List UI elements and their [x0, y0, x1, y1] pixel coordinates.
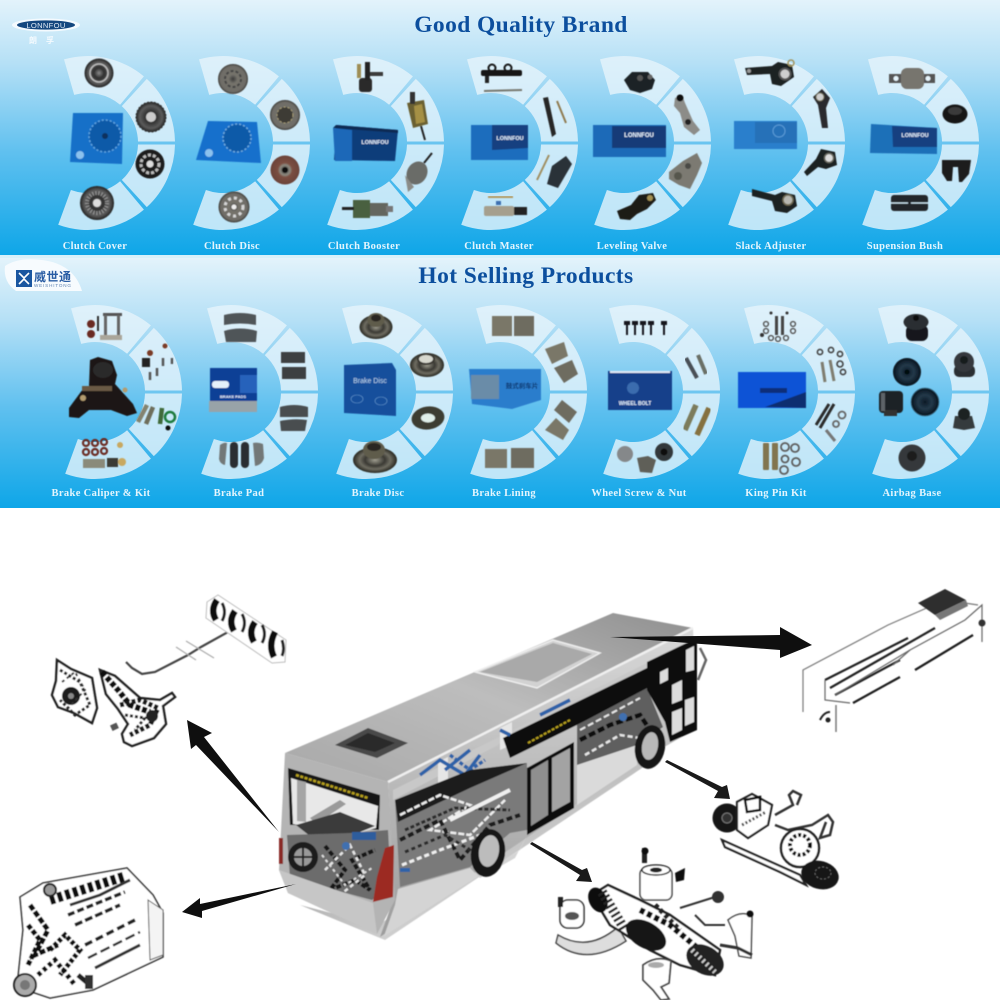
right gear hub: [681, 938, 729, 982]
part drawing: front axle assembly: [556, 848, 754, 1000]
engine block outline: [17, 868, 163, 998]
axle beam: [722, 840, 806, 885]
part drawing: rear axle assembly: [712, 791, 842, 893]
part: booster top: [357, 62, 383, 92]
panel background: [0, 0, 1000, 255]
intake details: [28, 880, 140, 985]
connecting pipe: [126, 632, 228, 674]
product box: [333, 125, 398, 161]
lower front side panel: [384, 835, 527, 936]
arc segments: [461, 56, 578, 230]
valve housing left: [52, 660, 97, 723]
flywheel cover: [148, 900, 163, 960]
part: bush bottom: [891, 195, 928, 211]
product: airbag base: [872, 305, 989, 499]
part: disc top: [218, 64, 248, 94]
part: bush right lower: [942, 160, 971, 182]
part: disc right lower: [410, 404, 446, 432]
main housing: [584, 884, 720, 975]
product box: Brake Disc: [353, 378, 387, 385]
part: bolts top: [624, 321, 667, 335]
part: kit bottom: [83, 439, 126, 468]
front cutaway chassis: [395, 763, 527, 887]
label: Leveling Valve: [597, 241, 667, 252]
part: lining right lower: [545, 400, 577, 440]
label: Clutch Disc: [204, 241, 260, 252]
part: kit right upper: [142, 344, 172, 380]
product: wheel screw and nut: [591, 305, 720, 499]
part: pads right upper: [281, 352, 306, 379]
product: clutch disc: [193, 56, 310, 252]
label: Brake Lining: [472, 488, 536, 499]
product box: WHEEL BOLT: [619, 401, 651, 407]
centre roof hatch: [475, 640, 600, 688]
logo: Lonnfou: 朗孚: [29, 35, 63, 45]
part: pads bottom: [219, 442, 264, 468]
starter: [85, 975, 93, 989]
product box: [196, 121, 261, 163]
left brake drum: [712, 804, 742, 832]
product: slack adjuster: [728, 56, 845, 252]
part: kit right lower: [138, 405, 175, 430]
product box: [469, 369, 541, 409]
label: Wheel Screw & Nut: [591, 488, 687, 499]
part: cylinder top: [481, 64, 522, 91]
arrow: to brake module: [187, 720, 279, 832]
valve rail: [50, 876, 126, 900]
label: Slack Adjuster: [735, 241, 807, 252]
part: kit bottom: [763, 443, 800, 474]
mid window columns: [438, 722, 512, 786]
product: leveling valve: [593, 56, 711, 252]
part: kit right lower: [816, 404, 846, 441]
title: Hot Selling Products: [418, 263, 634, 289]
product box: LONNFOU: [624, 133, 654, 139]
logo: Weishitong: 威世通: [34, 269, 71, 284]
part: bush top: [889, 68, 935, 89]
arc segments: [327, 56, 444, 230]
part: cylinder bottom: [484, 197, 527, 216]
bus roof: [285, 613, 693, 782]
label: Airbag Base: [883, 488, 941, 499]
tail light: [373, 845, 394, 902]
right air spring: [720, 910, 754, 958]
product box: [209, 368, 257, 412]
part: nuts bottom: [617, 443, 673, 473]
roof panel sketch: [803, 600, 978, 712]
blue air system pipes: [420, 700, 630, 775]
part: pads top: [224, 313, 257, 342]
coil valve row: [206, 595, 286, 663]
arc segments: [738, 305, 855, 479]
product box: [471, 125, 528, 160]
left air spring: [556, 897, 626, 955]
upper window band: [393, 645, 683, 800]
lower rear side panel: [577, 738, 637, 805]
label: Brake Pad: [214, 488, 264, 499]
lower rails: [853, 635, 973, 703]
product box: LONNFOU: [361, 140, 389, 146]
part: caliper: [69, 357, 137, 418]
product box: [70, 113, 123, 164]
roof rail highlight: [388, 628, 693, 782]
part: booster right upper: [407, 92, 428, 140]
arc segments: [603, 305, 720, 479]
label: Clutch Booster: [328, 241, 400, 252]
part: disc right upper: [410, 353, 444, 377]
product box: [608, 371, 672, 410]
panel: good quality brand: [0, 0, 1000, 255]
product: brake disc: [336, 305, 453, 499]
break marks: [176, 641, 214, 660]
part: studs right lower: [685, 405, 709, 435]
part: base right upper: [954, 352, 975, 377]
part: disc top: [360, 313, 392, 339]
part: valve right upper: [674, 94, 700, 135]
part: adjuster right upper: [813, 89, 830, 128]
part: disc bottom: [218, 192, 250, 222]
part: adjuster top: [745, 60, 794, 86]
part: disc right lower: [270, 156, 300, 184]
part: bolts right upper: [686, 355, 706, 378]
part: valve bottom: [617, 193, 656, 220]
part: cover right lower: [136, 150, 164, 178]
logo: Lonnfou: LONNFOU: [26, 21, 66, 30]
product box: [344, 363, 396, 416]
part: base top: [904, 314, 928, 341]
part: adjuster bottom: [752, 189, 797, 213]
part: disc bottom: [353, 441, 397, 473]
arrow: to rear axle: [665, 760, 730, 799]
product: brake caliper and kit: [52, 305, 182, 499]
arc segments: [336, 305, 453, 479]
product: brake pad: [201, 305, 318, 499]
product: suspension bush: [862, 56, 979, 252]
logo: Lonnfou: [12, 18, 80, 45]
arrow: to front axle: [530, 842, 592, 882]
front roof hatch: [335, 728, 408, 758]
product: clutch master: [461, 56, 578, 252]
brackets: [775, 791, 833, 838]
outer frame lines: [825, 605, 982, 703]
small side lamp: [279, 838, 283, 864]
bus front face: [279, 753, 395, 934]
part: lining bottom: [485, 448, 534, 468]
product: clutch booster: [327, 56, 444, 252]
arc segments: [862, 56, 979, 230]
top air spring: [640, 848, 685, 900]
divider strip: [0, 255, 1000, 258]
product: brake lining: [469, 305, 587, 499]
arrow: to roof frame: [610, 627, 812, 658]
bus side body: [380, 628, 697, 937]
windshield: [288, 768, 380, 840]
front engine bay: [287, 830, 391, 900]
part: kit top: [87, 313, 122, 340]
product box: BRAKE PADS: [220, 394, 246, 399]
part: kit top: [760, 312, 795, 341]
arc segments: [594, 56, 711, 230]
product box: [870, 124, 937, 154]
part: booster bottom: [342, 200, 393, 218]
part drawing: brake module and coil valves: [52, 595, 286, 746]
label: Brake Caliper & Kit: [52, 488, 151, 499]
part drawing: roof duct frame: [803, 589, 986, 732]
valve housing right: [100, 670, 175, 746]
part: lining right upper: [545, 342, 578, 383]
top cluster: [44, 884, 56, 896]
part drawing: diesel engine: [14, 868, 163, 998]
part: booster right lower: [402, 153, 432, 192]
title: Good Quality Brand: [414, 12, 628, 38]
part: cylinder right lower: [537, 155, 572, 188]
part: lining top: [492, 316, 534, 336]
label: Brake Disc: [352, 488, 404, 499]
arc segments: [65, 305, 182, 479]
bus ground shadow skirt: [300, 760, 648, 940]
link rods: [680, 892, 725, 925]
part: disc right upper: [270, 100, 300, 130]
dark vent: [918, 589, 966, 615]
part: base bottom: [898, 444, 926, 472]
label: Clutch Cover: [63, 241, 127, 252]
part: adjuster right lower: [804, 149, 837, 176]
part: cover bottom: [80, 186, 114, 220]
front wheel: [467, 826, 509, 880]
panel: hot selling products: [0, 258, 1000, 508]
part: base center right: [911, 388, 939, 416]
product box: [738, 372, 806, 408]
part: valve top: [624, 72, 655, 93]
arc segments: [201, 305, 318, 479]
label: Clutch Master: [464, 241, 534, 252]
product box: [734, 121, 797, 149]
part: kit right upper: [817, 347, 846, 382]
rear stowed parts: [698, 648, 706, 680]
product box: LONNFOU: [496, 136, 524, 142]
part: pads right lower: [280, 405, 308, 431]
part: cover top: [84, 58, 114, 88]
connector knobs: [978, 620, 986, 626]
logo: Weishitong: [5, 259, 82, 291]
right brake drum: [798, 857, 842, 893]
rear frame: [647, 638, 697, 742]
rear cutaway: [577, 688, 663, 765]
part: cylinder right upper: [543, 97, 566, 137]
cutaway black beam: [503, 668, 652, 758]
product box: LONNFOU: [901, 133, 929, 139]
rear wheel: [631, 723, 669, 771]
arc segments: [872, 305, 989, 479]
part: bush right upper: [942, 104, 968, 124]
differential: [781, 829, 819, 867]
crank pulley: [14, 974, 36, 996]
product box: [593, 125, 666, 157]
destination text band: [528, 720, 570, 743]
part: valve right lower: [669, 153, 702, 189]
arc segments: [193, 56, 310, 230]
arc segments: [58, 56, 175, 230]
bus cutaway illustration: [279, 613, 706, 940]
arc segments: [728, 56, 845, 230]
arc segments: [470, 305, 587, 479]
front bumper: [279, 870, 377, 934]
part: base right lower: [953, 408, 975, 430]
bottom air spring: [643, 959, 671, 1000]
air bag housing: [737, 794, 772, 838]
product: clutch cover: [58, 56, 175, 252]
arrow: to engine: [182, 884, 296, 918]
logo: Weishitong: WEISHITONG: [34, 283, 71, 288]
ducts: [825, 628, 935, 695]
part: cover right upper: [136, 102, 166, 132]
panel background: [0, 258, 1000, 508]
label: King Pin Kit: [745, 488, 807, 499]
product: king pin kit: [738, 305, 855, 499]
label: Supension Bush: [867, 241, 943, 252]
part: base center left: [879, 391, 903, 416]
middle door: [527, 742, 574, 835]
part: base center top: [893, 358, 921, 386]
product box: 鼓式刹车片: [506, 381, 538, 390]
